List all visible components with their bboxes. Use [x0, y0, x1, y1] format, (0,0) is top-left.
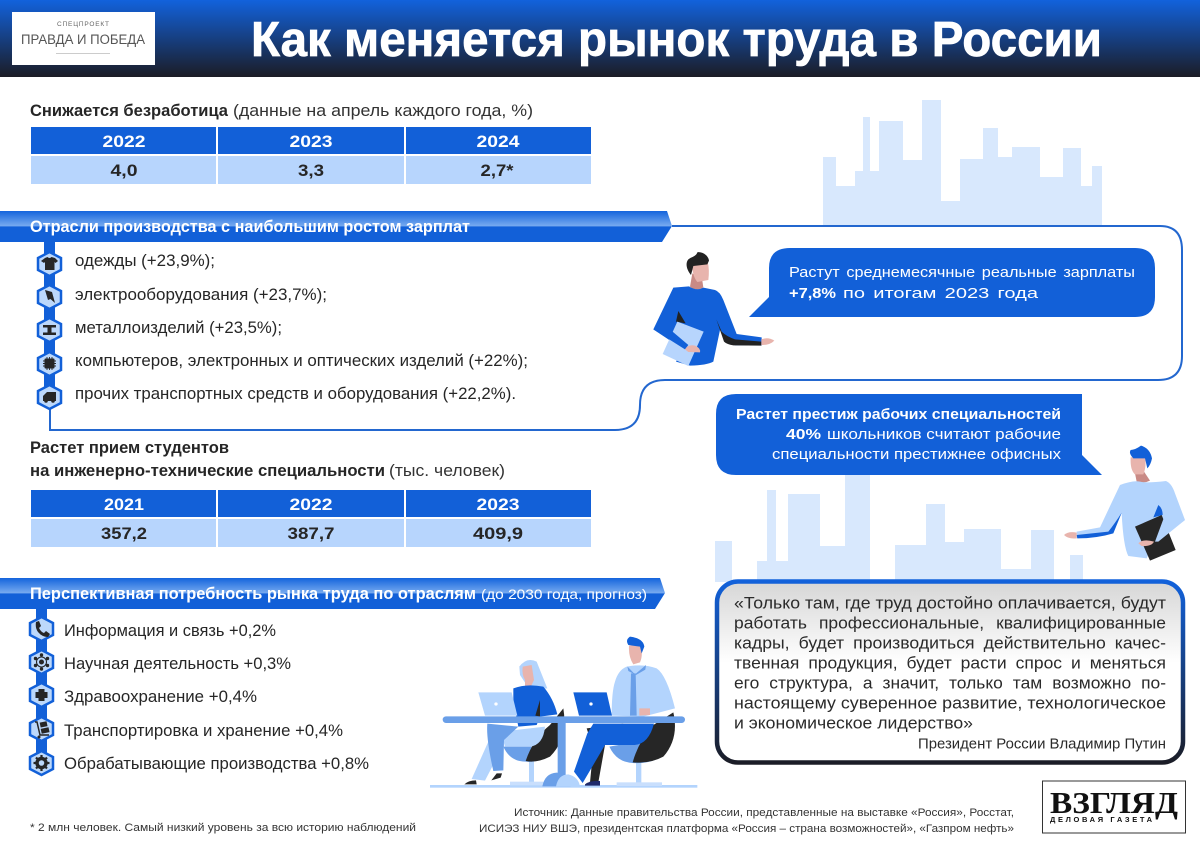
sources: Источник: Данные правительства России, представленные на выставке «Россия», Росстат, [514, 807, 1014, 819]
icon: electrical equipment [38, 285, 61, 309]
speech bubble: blue-collar prestige: специальности престижнее офисных [772, 446, 1062, 463]
list text: компьютеров, электронных и оптических изделий (+22%); [75, 352, 528, 370]
quote panel: твенная продукция, будет расти спрос и меняться [734, 654, 1166, 672]
logo: Взгляд: ВЗГЛЯД [1050, 785, 1178, 820]
heading: engineering students: на инженерно-технические специальности [30, 462, 385, 480]
icon: truck [38, 385, 61, 409]
ribbon: labour market demand [0, 578, 665, 609]
sources [479, 807, 1014, 835]
title: Как меняется рынок труда в России [251, 13, 1102, 67]
icon: hand truck with boxes [30, 717, 53, 741]
speech bubble: real wages: +7,8% [789, 285, 836, 302]
ribbon: wage growth industries [0, 211, 672, 242]
logo: Правда и победа: СПЕЦПРОЕКТ [57, 21, 109, 28]
table: engineering students: 387,7 [288, 525, 334, 543]
table: engineering students: 409,9 [473, 525, 523, 543]
quote panel: его структура, а значит, только там возможно по- [734, 674, 1166, 692]
quote panel: «Только там, где труд достойно оплачивается, будут [734, 594, 1166, 612]
quote panel: работать профессиональные, квалифицированные [734, 614, 1166, 632]
table: unemployment: 2023 [290, 133, 332, 151]
table: engineering students: 2023 [476, 496, 520, 514]
speech bubble: blue-collar prestige [716, 394, 1102, 475]
list: sector demand forecast [30, 609, 369, 775]
list text: электрооборудования (+23,7%); [75, 286, 327, 304]
table: unemployment: 4,0 [110, 162, 138, 180]
ribbon: labour market demand: (до 2030 года, прогноз) [481, 586, 647, 602]
speech bubble: blue-collar prestige: 40% [786, 426, 821, 443]
illustration: man in blue sweater [653, 252, 774, 366]
heading: engineering students: Растет прием студентов [30, 439, 229, 457]
illustration: man with black folder [1064, 446, 1185, 561]
list text: металлоизделий (+23,5%); [75, 319, 282, 337]
icon: gear [30, 751, 53, 775]
speech bubble: real wages: по итогам 2023 года [843, 285, 1039, 302]
list: industries with wage growth [38, 242, 528, 409]
icon: phone [30, 617, 53, 641]
logo: Взгляд: ДЕЛОВАЯ ГАЗЕТА [1050, 815, 1153, 824]
quote panel [717, 582, 1183, 762]
list text: Обрабатывающие производства +0,8% [64, 755, 369, 773]
logo: Взгляд [1042, 781, 1186, 833]
table: engineering students: 357,2 [101, 525, 147, 543]
list text: Транспортировка и хранение +0,4% [64, 722, 343, 740]
list text: одежды (+23,9%); [75, 252, 215, 270]
icon: atom [30, 650, 53, 674]
speech bubble: blue-collar prestige: Растет престиж рабочих специальностей [736, 406, 1061, 423]
illustration: two people at a table with laptops [430, 637, 697, 788]
icon: metal beam [38, 318, 61, 342]
quote panel: кадры, будет производиться действительно качес- [734, 634, 1166, 652]
logo: Правда и победа [12, 12, 155, 65]
heading: unemployment [30, 102, 533, 120]
footnote: * 2 млн человек. Самый низкий уровень за всю историю наблюдений [30, 822, 416, 834]
quote attribution: Президент России Владимир Путин [918, 736, 1166, 752]
logo: Правда и победа: ПРАВДА И ПОБЕДА [21, 32, 145, 47]
heading: unemployment: Снижается безработица [30, 102, 229, 120]
list text: Здравоохранение +0,4% [64, 688, 257, 706]
table: engineering students [31, 490, 591, 547]
connector outline: wage panel [50, 226, 1182, 430]
icon: microchip [38, 352, 61, 376]
speech bubble: real wages [749, 248, 1155, 317]
list text: Информация и связь +0,2% [64, 622, 276, 640]
list text [64, 622, 369, 773]
table: engineering students: 2022 [290, 496, 332, 514]
quote panel: и экономическое лидерство» [734, 714, 973, 732]
skyline: upper background [823, 100, 1102, 226]
table: engineering students: 2021 [104, 496, 144, 514]
heading: unemployment: (данные на апрель каждого года, %) [233, 102, 533, 120]
sources: ИСИЭЗ НИУ ВШЭ, президентская платформа «Россия – страна возможностей», «Газпром нефть» [479, 823, 1014, 835]
header band [0, 0, 1200, 77]
list text [75, 252, 528, 403]
speech bubble: blue-collar prestige: школьников считают рабочие [827, 426, 1061, 443]
heading: engineering students [30, 439, 505, 480]
list text: прочих транспортных средств и оборудования (+22,2%). [75, 385, 516, 403]
speech bubble: real wages: Растут среднемесячные реальные зарплаты [789, 264, 1135, 281]
list text: Научная деятельность +0,3% [64, 655, 291, 673]
icon: medical cross [30, 683, 53, 707]
table: unemployment: 2022 [102, 133, 146, 151]
table: unemployment: 2024 [476, 133, 520, 151]
table: unemployment: 2,7* [480, 162, 514, 180]
table: unemployment [31, 127, 591, 184]
skyline: lower background [715, 470, 1083, 582]
icon: clothing [38, 252, 61, 276]
quote panel: настоящему суверенное развитие, технологическое [734, 694, 1166, 712]
table: unemployment: 3,3 [298, 162, 324, 180]
heading: engineering students: (тыс. человек) [389, 462, 505, 480]
ribbon: labour market demand: Перспективная потребность рынка труда по отраслям [30, 585, 476, 603]
ribbon: wage growth industries: Отрасли производства с наибольшим ростом зарплат [30, 218, 470, 236]
